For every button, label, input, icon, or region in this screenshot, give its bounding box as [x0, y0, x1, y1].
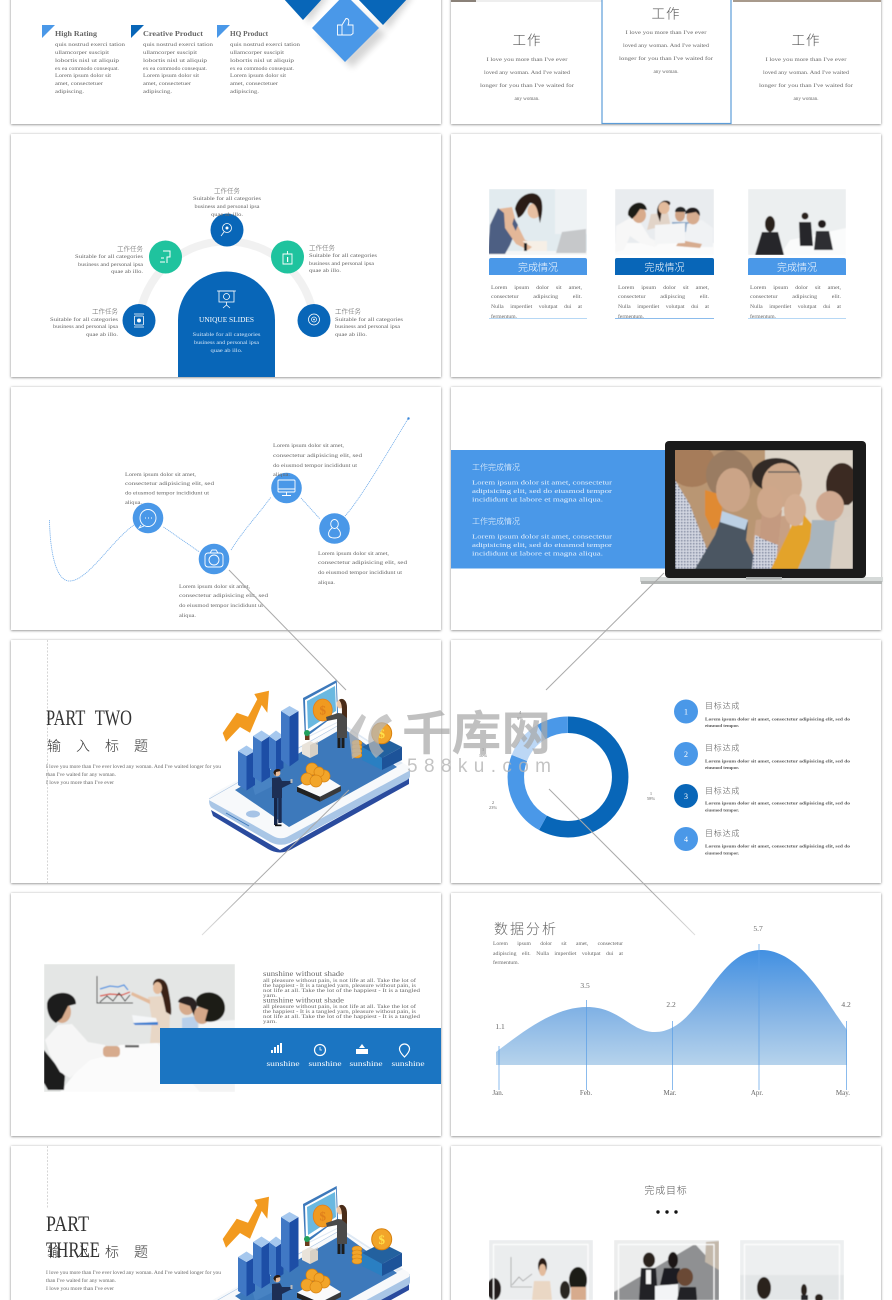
description: fermentum.: [493, 959, 520, 966]
illustration: isometric phone with charts: $: [378, 1232, 385, 1247]
node: top: 工作任务: [214, 186, 240, 195]
text block: yarn.: [263, 994, 277, 999]
blue band: sunshine: [350, 1059, 383, 1068]
node: lower left: quae ab illo.: [86, 332, 119, 338]
dotted vertical rule: [46, 640, 48, 883]
body text: [46, 1269, 221, 1292]
node: upper left green: Suitable for all categories: [75, 253, 143, 260]
heading: 完成目标: [644, 1184, 688, 1197]
photo card 2: Lorem ipsum dolor sit amet,: [618, 285, 710, 291]
node: top: business and personal ipsa: [194, 204, 260, 210]
text block: yarn.: [263, 1020, 277, 1025]
node: monitor: consectetur adipisicing elit, sed: [273, 453, 362, 459]
illustration: isometric phone with charts: [209, 680, 410, 852]
card: right: 工作: [792, 33, 820, 48]
card: right: any woman.: [794, 96, 819, 102]
area chart: [492, 924, 851, 1097]
panel: sunshine photo: [11, 893, 441, 1136]
feature: Creative Product: adipiscing.: [143, 89, 173, 95]
photo card 2: 完成情况: [644, 261, 684, 274]
illustration: isometric phone with charts: $: [378, 726, 385, 741]
icon: bars: [271, 1043, 282, 1053]
donut chart: 4: [519, 710, 522, 715]
three dots: [656, 1210, 678, 1214]
blue text band: Lorem ipsum dolor sit amet, consectetur: [472, 534, 613, 540]
node: lower right: Suitable for all categories: [335, 316, 403, 323]
icon: thumbs-up diamond: [312, 0, 379, 62]
node: lower left: business and personal ipsa: [53, 324, 119, 330]
blue text band: [451, 450, 665, 568]
feature: High Rating: amet, consectetuer: [55, 81, 103, 87]
watermark: 千库网 logo: 千库网: [402, 707, 551, 760]
node: top: quae ab illo.: [211, 212, 244, 218]
node: camera: [179, 544, 268, 619]
node: monitor: [271, 443, 362, 503]
blue band: [160, 1028, 441, 1084]
feature: Creative Product: Creative Product: [143, 30, 204, 38]
feature: High Rating: ex ea commodo consequat.: [55, 66, 120, 72]
donut chart: 58%: [647, 796, 655, 801]
feature: High Rating: Lorem ipsum dolor sit: [55, 73, 111, 79]
node: upper right green: 工作任务: [309, 243, 336, 252]
goal item 3: eiusmod tempor.: [705, 808, 739, 812]
heading: part three: THREE: [46, 1237, 100, 1262]
photo card 3: Lorem ipsum dolor sit amet,: [750, 285, 842, 291]
photo card 2: fermentum.: [618, 313, 645, 320]
feature: HQ Product: ullamcorper suscipit: [230, 50, 285, 56]
goal item 3: Lorem ipsum dolor sit amet, consectetur adipisicing elit, sed do: [705, 800, 851, 806]
subtitle: 输入标题: [47, 1244, 148, 1260]
icon: location pin: [400, 1044, 410, 1057]
feature: HQ Product: Lorem ipsum dolor sit: [230, 73, 286, 79]
feature: HQ Product: amet, consectetuer: [230, 81, 278, 87]
node: camera: Lorem ipsum dolor sit amet,: [179, 584, 251, 590]
watermark: 千库网 logo: [349, 707, 551, 777]
blue band: sunshine: [308, 1059, 342, 1068]
node: user: aliqua.: [318, 580, 336, 586]
photo card 2: Nulla imperdiet volutpat dui at: [618, 304, 709, 310]
node: top: Suitable for all categories: [193, 195, 261, 202]
card: middle highlighted: 工作: [652, 6, 680, 22]
area chart: Feb.: [580, 1089, 592, 1097]
photo strip slices: [451, 0, 881, 2]
central arch: business and personal ipsa: [194, 340, 260, 346]
card: middle highlighted: loved any woman. And I've waited: [623, 43, 709, 49]
photo card 3: [748, 189, 846, 320]
node: chat: aliqua.: [125, 500, 143, 506]
panel: laptop with work status: [451, 387, 883, 630]
node: upper right green: quae ab illo.: [309, 268, 342, 274]
panel: data analysis: [451, 893, 881, 1136]
node: lower right: 工作任务: [335, 306, 362, 316]
dotted curve with arrow: [50, 417, 410, 581]
donut chart: 1: [650, 791, 652, 796]
photo card 1: Nulla imperdiet volutpat dui at: [491, 304, 582, 310]
photo: meeting presentation: [44, 964, 235, 1092]
goal item 4: Lorem ipsum dolor sit amet, consectetur adipisicing elit, sed do: [705, 844, 851, 848]
goal item 1: [674, 700, 851, 728]
feature: Creative Product: [131, 25, 213, 95]
text block: [263, 969, 421, 1025]
node: user: do eiusmod tempor incididunt ut: [318, 570, 403, 576]
photo card 3: 完成情况: [777, 261, 817, 274]
goal item 4: [674, 827, 851, 856]
card: middle highlighted: I love you more than I've ever: [626, 30, 707, 36]
text block: sunshine without shade: [263, 969, 345, 978]
heading: part two: PART TWO: [46, 705, 132, 730]
heading: part three: [46, 1211, 100, 1262]
node: upper right green: business and personal ipsa: [309, 261, 375, 267]
goal item 2: Lorem ipsum dolor sit amet, consectetur adipisicing elit, sed do: [705, 758, 851, 764]
text block: the happiest - It is a tangled yarn, pleasure without pain, is: [263, 984, 416, 989]
node: upper right green: Suitable for all categories: [309, 252, 377, 259]
feature: HQ Product: lobortis nisl ut aliquip: [230, 58, 294, 64]
illustration: isometric phone with charts: [209, 1186, 410, 1300]
card: left: 工作: [512, 33, 542, 48]
feature: Creative Product: quis nostrud exerci tation: [143, 42, 213, 48]
donut chart: 3: [482, 747, 485, 752]
text block: sunshine without shade: [263, 996, 345, 1004]
card: middle highlighted: [602, 0, 731, 124]
card: left: any woman.: [514, 96, 540, 102]
node: upper left green: business and personal ipsa: [78, 262, 144, 268]
node: lower left: Suitable for all categories: [50, 316, 118, 323]
blue text band: adipisicing elit, sed do eiusmod tempor: [472, 488, 613, 495]
central arch: Suitable for all categories: [192, 331, 260, 338]
panel: part three: [11, 1146, 441, 1300]
area chart: 3.5: [580, 981, 590, 990]
node: chat: Lorem ipsum dolor sit amet,: [125, 472, 197, 478]
card: middle highlighted: any woman.: [654, 69, 679, 75]
text block: all pleasure without pain, is not life at all. Take the lot of: [263, 1005, 417, 1010]
blue text band: incididunt ut labore et magna aliqua.: [472, 550, 604, 558]
node: chat: consectetur adipisicing elit, sed: [125, 481, 214, 487]
photo card 1: 完成情况: [518, 261, 558, 274]
icon: podium: [356, 1044, 368, 1054]
illustration: isometric phone with charts: $: [319, 702, 326, 718]
feature: Creative Product: ex ea commodo consequat.: [143, 66, 208, 72]
central arch: quae ab illo.: [210, 348, 243, 354]
panel: timeline curve: [11, 387, 441, 630]
icon: dark diamond left: [283, 0, 323, 20]
goal item 2: 目标达成: [705, 742, 740, 752]
goal item 3: 目标达成: [705, 786, 740, 796]
feature: Creative Product: lobortis nisl ut aliquip: [143, 58, 207, 64]
feature: Creative Product: Lorem ipsum dolor sit: [143, 73, 199, 79]
feature: HQ Product: ex ea commodo consequat.: [230, 66, 295, 72]
blue text band: 工作完成情况: [472, 462, 520, 472]
central arch: [178, 272, 275, 377]
node: upper left green: [75, 240, 182, 275]
body text: I love you more than I've ever loved any woman. And I've waited longer for you: [46, 763, 221, 770]
photo card 1: consectetur adipiscing elit.: [491, 294, 583, 300]
node: upper left green: 工作任务: [117, 244, 144, 253]
node: lower left: [50, 304, 156, 338]
area chart: 5.7: [753, 924, 763, 933]
illustration: isometric phone with charts: $: [319, 1208, 326, 1224]
feature: HQ Product: [217, 25, 300, 95]
feature: High Rating: quis nostrud exerci tation: [55, 42, 125, 48]
photo card 1: fermentum.: [491, 313, 518, 320]
goal item 4: 4: [684, 835, 688, 844]
feature: HQ Product: quis nostrud exerci tation: [230, 42, 300, 48]
goal item 4: eiusmod tempor.: [705, 850, 739, 856]
card: left: loved any woman. And I've waited: [484, 70, 570, 76]
node: top: [193, 186, 261, 246]
panel: three work cards: [451, 0, 881, 124]
node: chat: do eiusmod tempor incididunt ut: [125, 490, 210, 496]
photo: raised fists: [675, 450, 853, 569]
photo 1: [487, 1240, 593, 1300]
node: monitor: do eiusmod tempor incididunt ut: [273, 463, 358, 469]
blue text band: 工作完成情况: [472, 516, 520, 526]
body text: I love you more than I've ever: [46, 780, 114, 786]
photo card 2: [615, 189, 714, 320]
node: lower left: 工作任务: [92, 306, 118, 316]
donut chart: 23%: [489, 805, 497, 810]
photo card 1: [488, 189, 587, 320]
watermark: 千库网 logo: 588ku.com: [407, 756, 551, 777]
node: camera: consectetur adipisicing elit, sed: [179, 593, 268, 599]
blue text band: incididunt ut labore et magna aliqua.: [472, 496, 604, 504]
panel: unique slides arch diagram: [11, 134, 441, 377]
node: user: [318, 513, 407, 586]
goal item 3: 3: [684, 792, 688, 801]
feature: High Rating: ullamcorper suscipit: [55, 50, 110, 56]
description: [493, 941, 623, 966]
area chart: Apr.: [751, 1089, 763, 1097]
text block: the happiest - It is a tangled yarn, pleasure without pain, is: [263, 1010, 416, 1015]
node: lower right: quae ab illo.: [335, 332, 368, 338]
blue band: sunshine: [392, 1059, 425, 1068]
node: user: Lorem ipsum dolor sit amet,: [318, 551, 390, 557]
card: left: [480, 33, 574, 102]
heading: 数据分析: [494, 921, 556, 937]
subtitle: 输入标题: [47, 738, 148, 754]
text block: not life at all. Take the lot of the happiest - It is a tangled: [263, 989, 421, 994]
heading: part three: PART: [46, 1211, 89, 1236]
panel: goal donut: [451, 640, 881, 883]
area chart: 2.2: [666, 1000, 676, 1009]
icon: projector: [217, 291, 236, 308]
icon: clock: [314, 1044, 326, 1056]
blue text band: Lorem ipsum dolor sit amet, consectetur: [472, 480, 613, 486]
card: right: I love you more than I've ever: [766, 57, 847, 63]
icon: diamond shadow: [300, 0, 414, 68]
body text: I love you more than I've ever loved any woman. And I've waited longer for you: [46, 1269, 221, 1276]
photo card 2: consectetur adipiscing elit.: [618, 294, 710, 300]
text block: all pleasure without pain, is not life at all. Take the lot of: [263, 979, 417, 984]
feature: HQ Product: HQ Product: [230, 30, 269, 38]
photo 2: [614, 1240, 719, 1300]
node: camera: aliqua.: [179, 613, 197, 619]
blue text band: adipisicing elit, sed do eiusmod tempor: [472, 542, 613, 549]
node: chat: [125, 472, 214, 533]
card: middle highlighted: longer for you than I've waited for: [619, 55, 713, 62]
goal item 1: 目标达成: [705, 700, 740, 710]
area chart: 1.1: [495, 1022, 505, 1031]
node: lower right: business and personal ipsa: [335, 324, 401, 330]
dotted vertical rule: [46, 1146, 48, 1208]
text block: not life at all. Take the lot of the happiest - It is a tangled: [263, 1015, 421, 1020]
node: upper right green: [271, 240, 377, 274]
goal item 2: [674, 742, 851, 770]
description: Lorem ipsum dolor sit amet, consectetur: [493, 941, 623, 947]
donut chart: 10%: [479, 753, 487, 758]
area chart: May.: [836, 1089, 850, 1097]
node: upper left green: quae ab illo.: [111, 269, 144, 275]
card: left: I love you more than I've ever: [486, 57, 568, 63]
description: adipiscing elit. Nulla imperdiet volutpat dui at: [493, 951, 623, 957]
goal item 3: [674, 784, 851, 812]
feature: High Rating: lobortis nisl ut aliquip: [55, 58, 119, 64]
donut chart: 9%: [517, 716, 523, 721]
card: right: longer for you than I've waited for: [759, 82, 853, 89]
node: camera: do eiusmod tempor incididunt ut: [179, 603, 264, 609]
donut chart: [479, 710, 655, 829]
photo card 3: Nulla imperdiet volutpat dui at: [750, 304, 841, 310]
central arch: UNIQUE SLIDES: [199, 315, 254, 324]
body text: than I've waited for any woman.: [46, 771, 117, 778]
photo 3: [740, 1240, 844, 1300]
feature: High Rating: High Rating: [55, 30, 98, 38]
area chart: 4.2: [841, 1000, 851, 1009]
panel: three photo cards: [451, 134, 881, 377]
goal item 1: 1: [684, 708, 688, 716]
area chart: Mar.: [663, 1089, 677, 1097]
node: monitor: aliqua.: [273, 472, 291, 478]
panel: completion goals: [451, 1146, 881, 1300]
panel: feature columns with diamonds: [11, 0, 441, 124]
photo card 3: fermentum.: [750, 313, 777, 320]
goal item 1: Lorem ipsum dolor sit amet, consectetur adipisicing elit, sed do: [705, 716, 851, 722]
goal item 4: 目标达成: [705, 828, 740, 838]
panel: part two: [11, 640, 441, 883]
area chart: Jan.: [492, 1089, 504, 1097]
feature: High Rating: adipiscing.: [55, 89, 85, 95]
icon: dark diamond right: [357, 0, 408, 25]
node: user: consectetur adipisicing elit, sed: [318, 560, 407, 566]
goal item 2: 2: [684, 750, 688, 759]
arc track: [139, 241, 314, 320]
feature: Creative Product: amet, consectetuer: [143, 81, 191, 87]
node: lower right: [298, 304, 403, 338]
goal item 2: eiusmod tempor.: [705, 765, 739, 770]
donut chart: 2: [492, 800, 494, 805]
body text: [46, 763, 221, 786]
card: right: [759, 33, 853, 102]
card: right: loved any woman. And I've waited: [763, 70, 849, 76]
photo card 3: consectetur adipiscing elit.: [750, 294, 842, 300]
node: monitor: Lorem ipsum dolor sit amet,: [273, 443, 345, 449]
laptop: [640, 441, 883, 584]
feature: High Rating: [42, 25, 125, 95]
watermark: 588ku diagonal lines: [202, 570, 695, 935]
body text: than I've waited for any woman.: [46, 1277, 117, 1284]
feature: HQ Product: adipiscing.: [230, 89, 260, 95]
card: left: longer for you than I've waited for: [480, 82, 574, 89]
watermark logo mark: [349, 714, 392, 759]
goal item 1: eiusmod tempor.: [705, 723, 739, 728]
body text: I love you more than I've ever: [46, 1286, 114, 1292]
feature: Creative Product: ullamcorper suscipit: [143, 50, 198, 56]
blue band: sunshine: [266, 1059, 300, 1068]
photo card 1: Lorem ipsum dolor sit amet,: [491, 285, 583, 291]
